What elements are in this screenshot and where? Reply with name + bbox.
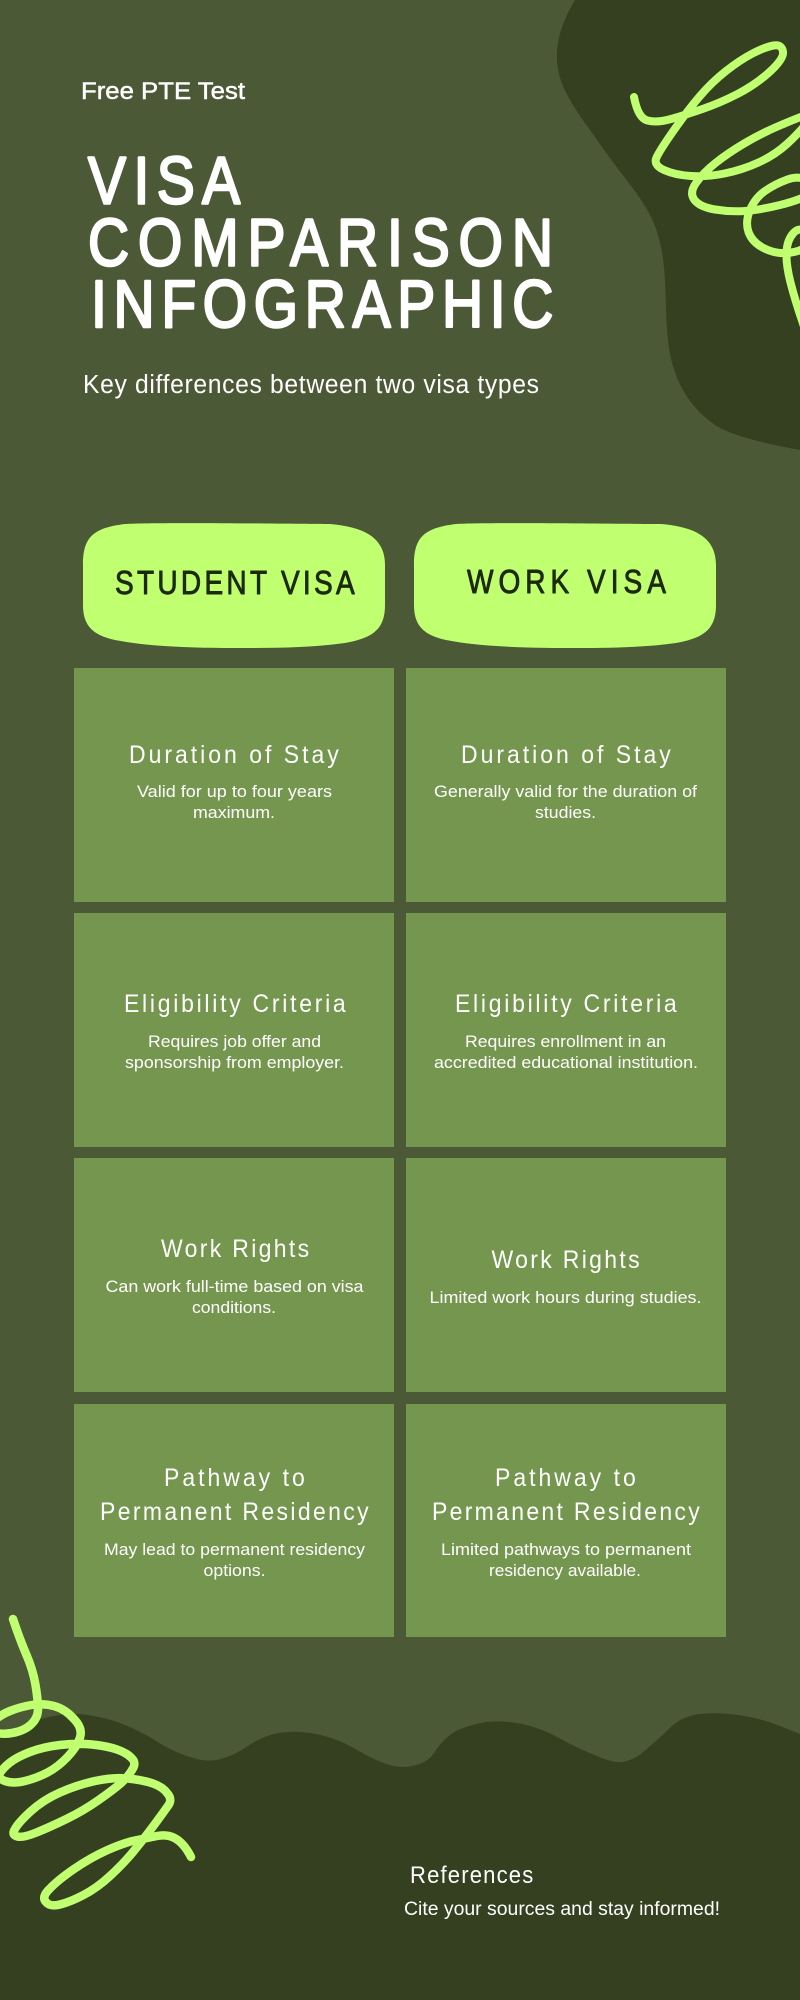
panel: work pathway to permanent residency [406,1404,726,1637]
panel: work duration of stay: Generally valid for the duration of [434,782,697,801]
top-right dark blob [557,0,800,450]
panel: work eligibility criteria: Eligibility Criteria [455,990,677,1018]
panel: student eligibility criteria: Eligibility Criteria [124,990,346,1018]
header button: student visa [83,523,385,648]
panel: work work rights: Limited work hours during studies. [430,1288,702,1307]
panel: student pathway to permanent residency [74,1404,394,1637]
title [88,144,553,342]
panel: work duration of stay: studies. [535,803,596,822]
panel: student eligibility criteria: sponsorship from employer. [125,1053,344,1072]
bottom-left lime squiggle [0,1619,191,1905]
panel: student duration of stay: maximum. [193,803,275,822]
subtitle: Key differences between two visa types [83,370,539,399]
panel: work duration of stay [406,668,726,902]
references footer: References [410,1861,533,1888]
panel: work duration of stay: Duration of Stay [461,741,671,769]
panel: student eligibility criteria: Requires job offer and [148,1032,321,1051]
references footer: Cite your sources and stay informed! [404,1899,720,1920]
references footer [404,1861,720,1920]
panel: work pathway to permanent residency: residency available. [489,1561,641,1580]
title: INFOGRAPHIC [91,268,553,342]
panel: work eligibility criteria: Requires enrollment in an [465,1032,666,1051]
bottom dark wave [0,1713,800,2000]
panel: student pathway to permanent residency: May lead to permanent residency [104,1540,366,1559]
brand label: Free PTE Test [81,78,245,105]
title: VISA [88,144,241,219]
panel: student work rights [74,1158,394,1392]
panel: work work rights [406,1158,726,1392]
panel: work eligibility criteria: accredited educational institution. [434,1053,698,1072]
panel: student duration of stay [74,668,394,902]
panel: work pathway to permanent residency: Permanent Residency [432,1498,700,1526]
panel: student duration of stay: Duration of Stay [129,741,339,769]
header button: work visa [414,523,716,648]
title: COMPARISON [88,206,553,281]
panel: student work rights: Work Rights [161,1235,309,1263]
panel: work work rights: Work Rights [492,1246,640,1274]
panel: student pathway to permanent residency: Permanent Residency [100,1498,369,1526]
panel: work pathway to permanent residency: Pathway to [495,1464,636,1492]
panel: student pathway to permanent residency: Pathway to [164,1464,305,1492]
header button: work visa: WORK VISA [467,564,666,601]
panel: work pathway to permanent residency: Limited pathways to permanent [441,1540,691,1559]
panel: student duration of stay: Valid for up to four years [137,782,332,801]
panel: student work rights: Can work full-time based on visa [106,1277,364,1296]
panel: work eligibility criteria [406,913,726,1147]
panel: student work rights: conditions. [192,1298,276,1317]
panel: student pathway to permanent residency: options. [204,1561,266,1580]
panel: student eligibility criteria [74,913,394,1147]
header button: student visa: STUDENT VISA [115,565,355,602]
top-right lime squiggle [634,45,800,345]
